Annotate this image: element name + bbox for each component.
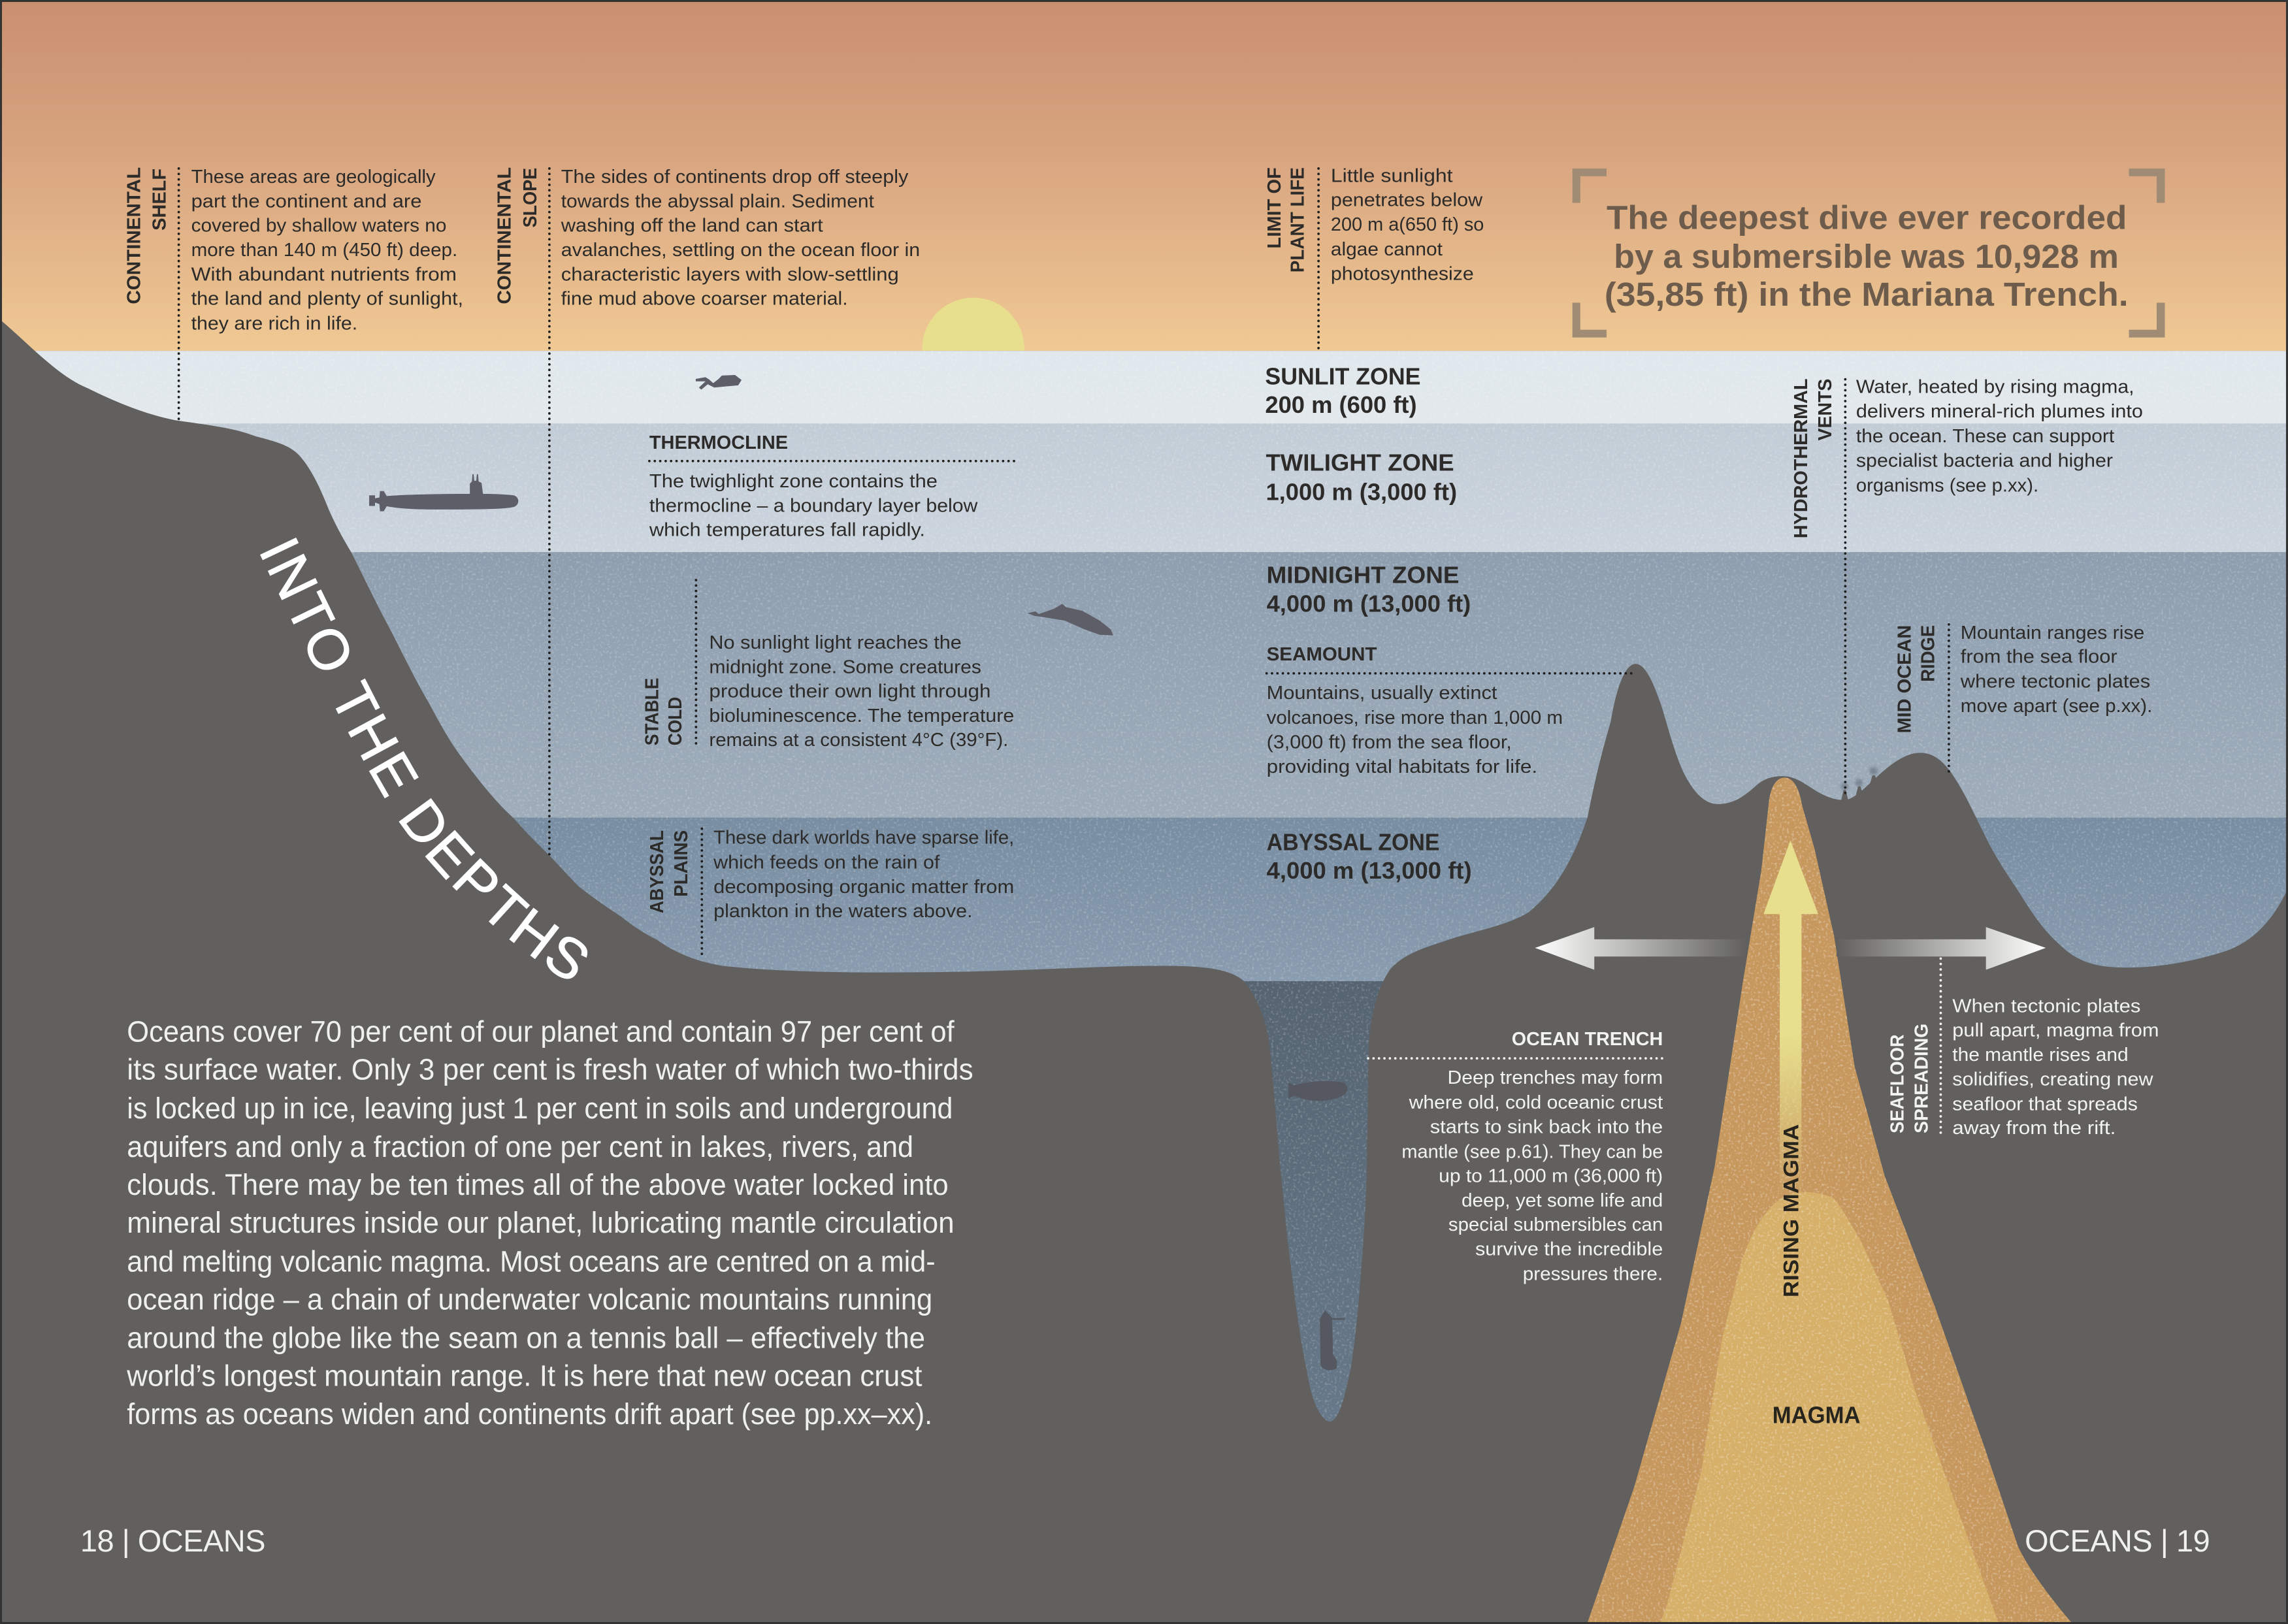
label: rising magma: RISING MAGMA bbox=[1780, 1124, 1803, 1297]
annotation: continental shelf: SHELF bbox=[150, 169, 171, 231]
annotation: continental shelf: These areas are geologically bbox=[191, 167, 436, 187]
zone label: twilight: 1,000 m (3,000 ft) bbox=[1266, 479, 1457, 505]
annotation: stable cold: midnight zone. Some creatures bbox=[709, 657, 981, 677]
callout: deepest dive bbox=[1573, 169, 2165, 338]
annotation: hydrothermal vents: organisms (see p.xx). bbox=[1856, 475, 2038, 496]
zone label: midnight bbox=[1267, 562, 1471, 617]
annotation: stable cold: produce their own light through bbox=[709, 681, 990, 702]
annotation: abyssal plains: These dark worlds have sparse life, bbox=[713, 828, 1014, 849]
annotation: limit of plant life: Little sunlight bbox=[1331, 165, 1453, 186]
icon: vertical submersible in trench bbox=[1320, 1310, 1345, 1371]
arrow: plate moving right bbox=[1837, 927, 2046, 970]
annotation: mid ocean ridge: move apart (see p.xx). bbox=[1961, 696, 2152, 717]
annotation: continental shelf: CONTINENTAL bbox=[123, 167, 144, 304]
annotation: limit of plant life bbox=[1264, 165, 1484, 350]
annotation: stable cold: STABLE bbox=[642, 678, 662, 745]
intro text block: clouds. There may be ten times all of the above water locked into bbox=[127, 1168, 949, 1201]
annotation: continental slope: towards the abyssal plain. Sediment bbox=[561, 191, 874, 212]
annotation: hydrothermal vents: specialist bacteria and higher bbox=[1856, 450, 2113, 471]
annotation: seamount: volcanoes, rise more than 1,000 m bbox=[1267, 707, 1563, 728]
annotation: stable cold: No sunlight light reaches the bbox=[709, 632, 962, 653]
annotation: thermocline bbox=[649, 432, 1019, 540]
annotation: continental shelf: they are rich in life. bbox=[191, 314, 357, 334]
annotation: continental shelf: more than 140 m (450 ft) deep. bbox=[191, 240, 457, 261]
annotation: continental shelf: With abundant nutrients from bbox=[191, 264, 457, 285]
intro text block: around the globe like the seam on a tennis ball – effectively the bbox=[127, 1322, 925, 1355]
annotation: seafloor spreading bbox=[1887, 958, 2159, 1139]
annotation: seafloor spreading: SEAFLOOR bbox=[1887, 1034, 1908, 1133]
annotation: ocean trench: Deep trenches may form bbox=[1448, 1067, 1663, 1088]
annotation: continental slope: washing off the land can start bbox=[561, 216, 823, 236]
annotation: seafloor spreading: away from the rift. bbox=[1952, 1118, 2116, 1139]
annotation: abyssal plains: PLAINS bbox=[671, 830, 692, 897]
intro text block: and melting volcanic magma. Most oceans are centred on a mid- bbox=[127, 1244, 936, 1278]
annotation: thermocline: thermocline – a boundary layer below bbox=[649, 495, 978, 516]
intro text block: mineral structures inside our planet, lubricating mantle circulation bbox=[127, 1206, 955, 1239]
annotation: continental slope bbox=[495, 167, 920, 856]
annotation: ocean trench: up to 11,000 m (36,000 ft) bbox=[1439, 1165, 1663, 1186]
intro text block: forms as oceans widen and continents drift apart (see pp.xx–xx). bbox=[127, 1397, 932, 1431]
zone label: abyssal: ABYSSAL ZONE bbox=[1267, 829, 1439, 855]
annotation: limit of plant life: LIMIT OF bbox=[1264, 167, 1285, 249]
annotation: ocean trench: where old, cold oceanic crust bbox=[1409, 1092, 1663, 1113]
annotation: thermocline: THERMOCLINE bbox=[649, 432, 788, 453]
annotation: hydrothermal vents: the ocean. These can support bbox=[1856, 426, 2114, 447]
magma chamber bbox=[1583, 773, 2080, 1624]
icon: setting sun bbox=[923, 298, 1024, 350]
zone label: midnight: MIDNIGHT ZONE bbox=[1267, 562, 1459, 588]
annotation: abyssal plains: decomposing organic matter from bbox=[713, 877, 1014, 898]
annotation: limit of plant life: 200 m a(650 ft) so bbox=[1331, 214, 1484, 235]
annotation: continental slope: characteristic layers with slow-settling bbox=[561, 264, 899, 285]
annotation: mid ocean ridge: where tectonic plates bbox=[1960, 672, 2150, 692]
callout: deepest dive: (35,85 ft) in the Mariana Trench. bbox=[1605, 276, 2129, 313]
annotation: ocean trench: special submersibles can bbox=[1448, 1214, 1663, 1235]
ocean zone bands bbox=[0, 351, 2288, 1438]
icon: whale bbox=[1028, 604, 1113, 636]
annotation: seamount bbox=[1267, 644, 1634, 777]
zone label: abyssal: 4,000 m (13,000 ft) bbox=[1267, 858, 1472, 884]
annotation: seafloor spreading: SPREADING bbox=[1911, 1024, 1932, 1133]
annotation: ocean trench: pressures there. bbox=[1523, 1263, 1663, 1284]
annotation: ocean trench: survive the incredible bbox=[1475, 1239, 1663, 1260]
callout: deepest dive: The deepest dive ever recorded bbox=[1607, 199, 2127, 236]
annotation: ocean trench: OCEAN TRENCH bbox=[1512, 1029, 1663, 1050]
annotation: seafloor spreading: pull apart, magma from bbox=[1952, 1020, 2159, 1041]
annotation: continental shelf: part the continent and are bbox=[191, 191, 421, 212]
annotation: continental slope: avalanches, settling on the ocean floor in bbox=[561, 240, 920, 261]
annotation: limit of plant life: photosynthesize bbox=[1331, 263, 1474, 284]
intro text block: its surface water. Only 3 per cent is fresh water of which two-thirds bbox=[127, 1053, 973, 1086]
annotation: seafloor spreading: the mantle rises and bbox=[1952, 1045, 2129, 1065]
annotation: stable cold: bioluminescence. The temperature bbox=[709, 706, 1014, 726]
zone label: twilight bbox=[1266, 450, 1457, 505]
annotation: seamount: (3,000 ft) from the sea floor, bbox=[1267, 732, 1512, 753]
annotation: hydrothermal vents: Water, heated by rising magma, bbox=[1856, 376, 2134, 397]
annotation: mid ocean ridge: MID OCEAN bbox=[1895, 625, 1916, 734]
intro text block: ocean ridge – a chain of underwater volcanic mountains running bbox=[127, 1282, 932, 1316]
annotation: continental shelf: the land and plenty of sunlight, bbox=[191, 289, 463, 310]
icon: submersible in trench bbox=[1288, 1081, 1347, 1101]
annotation: limit of plant life: algae cannot bbox=[1331, 239, 1443, 260]
annotation: limit of plant life: penetrates below bbox=[1331, 190, 1483, 211]
annotation: mid ocean ridge bbox=[1895, 623, 2152, 771]
annotation: seafloor spreading: When tectonic plates bbox=[1952, 996, 2140, 1016]
callout: deepest dive: by a submersible was 10,928 m bbox=[1614, 238, 2119, 275]
label: magma: MAGMA bbox=[1773, 1403, 1861, 1429]
annotation: continental slope: fine mud above coarser material. bbox=[561, 289, 848, 310]
zone label: sunlit: SUNLIT ZONE bbox=[1265, 363, 1420, 389]
intro text block bbox=[126, 1015, 973, 1431]
annotation: mid ocean ridge: from the sea floor bbox=[1961, 647, 2117, 668]
annotation: hydrothermal vents bbox=[1791, 376, 2143, 798]
annotation: thermocline: which temperatures fall rapidly. bbox=[649, 519, 925, 540]
intro text block: Oceans cover 70 per cent of our planet and contain 97 per cent of bbox=[127, 1015, 955, 1048]
annotation: continental slope: The sides of continents drop off steeply bbox=[561, 167, 909, 187]
annotation: ocean trench bbox=[1368, 1029, 1663, 1284]
icon: scuba diver bbox=[696, 375, 742, 390]
annotation: stable cold bbox=[642, 580, 1014, 751]
arrow: plate moving left bbox=[1535, 927, 1745, 970]
annotation: ocean trench: starts to sink back into the bbox=[1430, 1117, 1663, 1138]
page footer left: 18 | OCEANS bbox=[80, 1524, 265, 1558]
zone label: abyssal bbox=[1267, 829, 1472, 884]
annotation: stable cold: COLD bbox=[665, 697, 686, 745]
annotation: thermocline: The twighlight zone contains the bbox=[649, 471, 938, 492]
annotation: ocean trench: mantle (see p.61). They can be bbox=[1401, 1141, 1663, 1162]
zone label: twilight: TWILIGHT ZONE bbox=[1266, 450, 1454, 476]
annotation: stable cold: remains at a consistent 4°C (39°F). bbox=[709, 730, 1008, 751]
annotation: abyssal plains bbox=[647, 828, 1014, 959]
intro text block: aquifers and only a fraction of one per cent in lakes, rivers, and bbox=[127, 1130, 913, 1163]
title: INTO THE DEPTHS bbox=[260, 537, 588, 979]
annotation: continental shelf bbox=[123, 167, 463, 420]
annotation: seafloor spreading: solidifies, creating new bbox=[1952, 1069, 2154, 1090]
annotation: seamount: providing vital habitats for life. bbox=[1267, 756, 1537, 777]
annotation: mid ocean ridge: RIDGE bbox=[1918, 625, 1938, 682]
annotation: hydrothermal vents: delivers mineral-rich plumes into bbox=[1856, 401, 2143, 422]
annotation: seafloor spreading: seafloor that spreads bbox=[1952, 1094, 2138, 1114]
annotation: abyssal plains: plankton in the waters above. bbox=[713, 901, 973, 922]
annotation: limit of plant life: PLANT LIFE bbox=[1288, 167, 1309, 272]
annotation: hydrothermal vents: HYDROTHERMAL bbox=[1791, 379, 1812, 538]
zone label: midnight: 4,000 m (13,000 ft) bbox=[1267, 591, 1471, 617]
zone label: sunlit: 200 m (600 ft) bbox=[1265, 392, 1417, 418]
icon: submarine bbox=[369, 474, 518, 512]
annotation: abyssal plains: ABYSSAL bbox=[647, 830, 668, 913]
annotation: abyssal plains: which feeds on the rain of bbox=[713, 853, 940, 873]
annotation: ocean trench: deep, yet some life and bbox=[1462, 1190, 1663, 1211]
intro text block: is locked up in ice, leaving just 1 per cent in soils and underground bbox=[127, 1092, 953, 1125]
annotation: mid ocean ridge: Mountain ranges rise bbox=[1961, 623, 2144, 643]
sky background bbox=[0, 0, 2288, 351]
intro text block: world’s longest mountain range. It is here that new ocean crust bbox=[126, 1359, 923, 1393]
annotation: continental slope: SLOPE bbox=[520, 168, 541, 227]
zone label: sunlit bbox=[1265, 363, 1420, 418]
annotation: continental slope: CONTINENTAL bbox=[495, 167, 515, 304]
page footer right: OCEANS | 19 bbox=[2025, 1524, 2210, 1558]
annotation: seamount: SEAMOUNT bbox=[1267, 644, 1377, 665]
annotation: continental shelf: covered by shallow waters no bbox=[191, 216, 446, 236]
icon: hydrothermal vents bbox=[1841, 767, 1878, 802]
annotation: hydrothermal vents: VENTS bbox=[1815, 379, 1836, 440]
annotation: seamount: Mountains, usually extinct bbox=[1267, 683, 1497, 704]
arrow: rising magma bbox=[1763, 840, 1818, 1196]
